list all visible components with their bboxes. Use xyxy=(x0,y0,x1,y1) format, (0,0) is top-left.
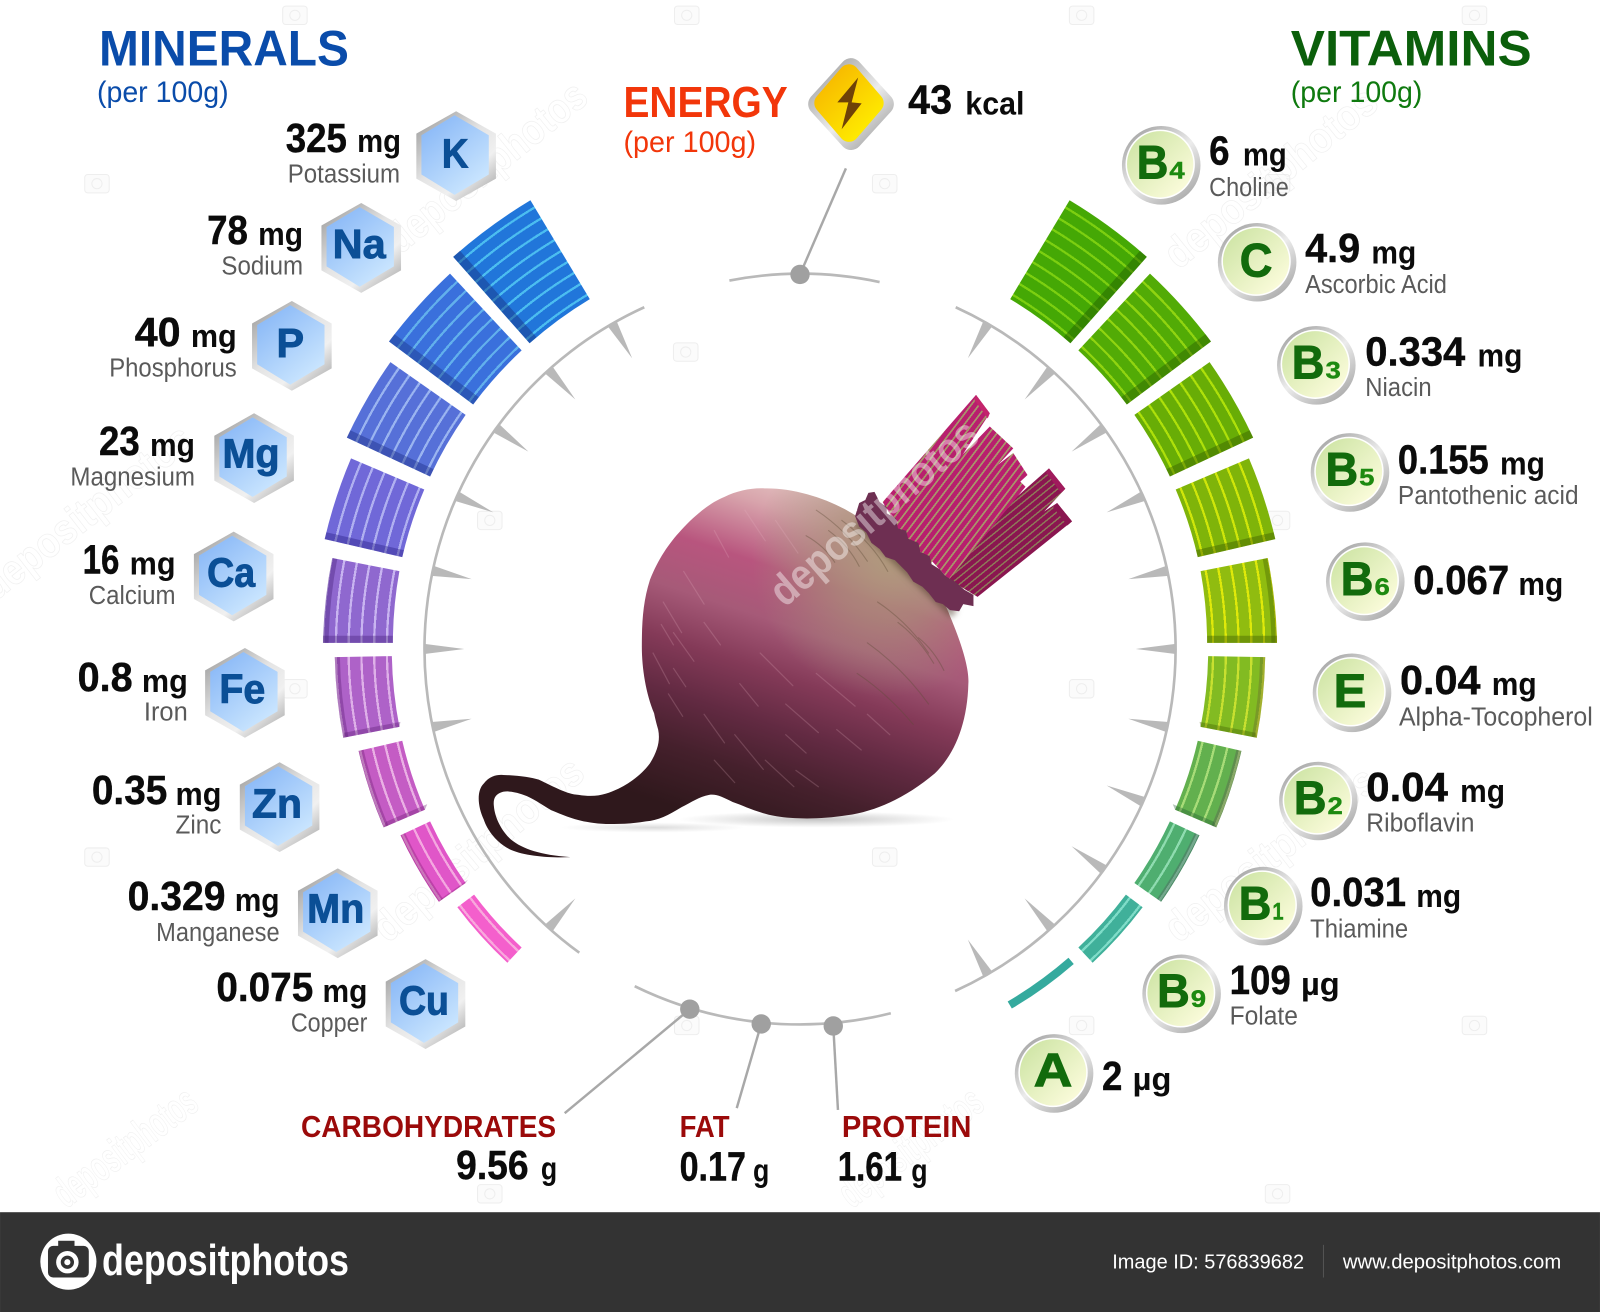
vitamin: B2 riboflavin: mg xyxy=(1460,772,1505,809)
bar: pantothenic acid xyxy=(1176,458,1275,557)
vitamin: B4 choline: Choline xyxy=(1209,174,1289,202)
vitamin: B4 choline: 4 xyxy=(1169,158,1185,185)
heading: vitamins: (per 100g) xyxy=(1291,76,1422,109)
faint watermark lettering: depositphotos xyxy=(829,1077,993,1217)
energy value: 43 xyxy=(908,76,952,122)
beet stems xyxy=(883,395,1072,597)
bar chart: vitamins xyxy=(1008,200,1277,1009)
mineral: sodium: mg xyxy=(258,215,303,252)
bar chart: minerals xyxy=(323,200,590,963)
vitamin: B9 folate: 9 xyxy=(1191,986,1206,1013)
mineral: copper xyxy=(216,959,465,1049)
bar: potassium xyxy=(453,200,590,343)
vitamin: B2 riboflavin: Riboflavin xyxy=(1366,810,1474,838)
bar: vitamin A xyxy=(1008,958,1074,1009)
vitamin: A xyxy=(1015,1034,1171,1113)
vitamin: B9 folate: B xyxy=(1157,965,1190,1017)
mineral: iron: mg xyxy=(142,662,188,699)
vitamin: C ascorbic acid: mg xyxy=(1371,233,1416,270)
mineral: phosphorus: Phosphorus xyxy=(109,355,237,383)
mineral: phosphorus: P xyxy=(277,320,304,366)
mineral: copper: 0.075 xyxy=(216,964,313,1010)
mineral: magnesium: 23 xyxy=(99,418,140,464)
beet crown shading xyxy=(479,488,968,857)
mineral: potassium xyxy=(286,111,496,201)
gauge: inner ring arcs xyxy=(424,274,1176,1024)
vitamin: B1 thiamine: B xyxy=(1239,877,1271,929)
mineral: iron xyxy=(78,648,285,738)
beet body xyxy=(479,488,968,857)
energy value: kcal xyxy=(965,84,1024,121)
mineral: zinc: Zn xyxy=(252,780,302,826)
bar: phosphorus xyxy=(347,362,466,477)
macronutrient: carbohydrates xyxy=(301,1110,557,1188)
mineral: calcium: 16 xyxy=(83,536,119,582)
macronutrient pointers xyxy=(565,999,843,1113)
vitamin: B1 thiamine: 0.031 xyxy=(1310,869,1406,915)
vitamin: B5 pantothenic acid: 0.155 xyxy=(1398,436,1489,482)
bar: folate xyxy=(1078,895,1143,963)
mineral: potassium: mg xyxy=(357,122,401,159)
bar: copper xyxy=(457,895,522,963)
vitamin: B2 riboflavin: B xyxy=(1294,772,1327,824)
vitamin: A: 2 xyxy=(1102,1053,1122,1099)
watermark across beet: depositphotos xyxy=(760,410,988,616)
faint watermark lettering: depositphotos xyxy=(1155,77,1387,278)
vitamin: B1 thiamine: 1 xyxy=(1272,898,1284,925)
vitamin: B4 choline: 6 xyxy=(1209,127,1230,173)
bar: sodium xyxy=(389,274,522,404)
vitamin: E alpha-tocopherol xyxy=(1313,654,1593,732)
mineral: sodium xyxy=(207,203,401,293)
macronutrient: protein: PROTEIN xyxy=(842,1110,971,1144)
mineral: manganese: 0.329 xyxy=(128,873,226,919)
vitamin: B6: 0.067 xyxy=(1413,557,1509,603)
mineral: potassium: Potassium xyxy=(288,161,400,189)
vitamin: B1 thiamine: Thiamine xyxy=(1310,916,1408,944)
vitamin: A: µg xyxy=(1133,1060,1171,1097)
macronutrient: protein: 1.61 xyxy=(838,1144,902,1190)
illustration: beetroot xyxy=(479,395,1072,857)
macronutrient: fat: 0.17 xyxy=(680,1144,746,1190)
bar: zinc xyxy=(359,741,427,827)
macronutrient: fat: FAT xyxy=(680,1110,730,1144)
mineral: magnesium: Mg xyxy=(222,430,280,476)
faint watermark cameras xyxy=(85,6,1487,1203)
bar: alpha-tocopherol xyxy=(1200,656,1265,738)
vitamin: B6: 6 xyxy=(1374,574,1390,601)
mineral: magnesium xyxy=(70,413,294,503)
mineral: sodium: 78 xyxy=(207,207,248,253)
faint watermark lettering xyxy=(0,71,1387,1217)
heading: energy xyxy=(623,78,788,159)
mineral: sodium: Na xyxy=(333,221,386,267)
icon: camera logo xyxy=(40,1234,96,1290)
shadow under leaf ruffle xyxy=(857,522,954,614)
mineral: zinc: mg xyxy=(176,775,221,812)
vitamin: B5 pantothenic acid: B xyxy=(1325,444,1358,496)
vitamin: B2 riboflavin: 0.04 xyxy=(1366,764,1448,810)
faint watermark lettering: depositphotos xyxy=(1155,757,1386,952)
mineral: manganese xyxy=(128,868,378,958)
beet skin streaks xyxy=(653,510,944,787)
mineral: calcium: Ca xyxy=(207,550,255,596)
vitamin: E alpha-tocopherol: mg xyxy=(1492,665,1537,702)
heading: energy: ENERGY xyxy=(623,78,788,127)
mineral: sodium: Sodium xyxy=(221,252,303,280)
vitamin: E alpha-tocopherol: 0.04 xyxy=(1400,657,1481,703)
macronutrient: fat xyxy=(680,1110,769,1190)
mineral: phosphorus xyxy=(109,301,332,391)
minerals list xyxy=(70,111,496,1049)
mineral: manganese: mg xyxy=(235,881,280,918)
mineral: magnesium: Magnesium xyxy=(70,464,195,492)
bar: niacin xyxy=(1134,362,1253,477)
bar: choline xyxy=(1010,200,1147,343)
vitamin: C ascorbic acid xyxy=(1218,223,1447,302)
mineral: manganese: Mn xyxy=(307,885,364,931)
gauge: tick marks xyxy=(425,321,1175,977)
vitamin: A: A xyxy=(1034,1045,1072,1097)
mineral: copper: Cu xyxy=(399,977,449,1023)
bar: riboflavin xyxy=(1173,741,1241,827)
bar: iron xyxy=(335,656,400,738)
bar: ascorbic acid xyxy=(1078,274,1211,404)
vitamin: C ascorbic acid: C xyxy=(1240,235,1272,287)
vitamin: B9 folate: 109 xyxy=(1230,957,1291,1003)
icon: energy lightning diamond xyxy=(819,69,883,139)
beet leaf ruffle xyxy=(855,492,973,611)
mineral: iron: Iron xyxy=(144,698,188,726)
macronutrient: protein xyxy=(838,1110,971,1190)
vitamin: E alpha-tocopherol: Alpha-Tocopherol xyxy=(1399,703,1593,731)
macronutrient: carbohydrates: CARBOHYDRATES xyxy=(301,1110,556,1144)
vitamin: B6 xyxy=(1326,542,1563,621)
mineral: calcium xyxy=(83,532,273,621)
mineral: magnesium: mg xyxy=(150,426,195,463)
mineral: zinc xyxy=(92,762,319,852)
vitamin: B2 riboflavin xyxy=(1279,762,1505,840)
mineral: copper: Copper xyxy=(291,1010,368,1038)
mineral: calcium: mg xyxy=(130,544,176,581)
vitamin: C ascorbic acid: 4.9 xyxy=(1305,225,1360,271)
vitamin: B2 riboflavin: 2 xyxy=(1328,793,1343,820)
mineral: iron: 0.8 xyxy=(78,654,133,700)
bar: thiamine xyxy=(1134,821,1199,902)
mineral: potassium: K xyxy=(442,130,469,176)
logo wordmark: depositphotos xyxy=(102,1236,349,1285)
vitamin: E alpha-tocopherol: E xyxy=(1334,665,1366,717)
vitamin: B3 niacin: mg xyxy=(1478,336,1522,373)
vitamin: B3 niacin xyxy=(1277,326,1522,405)
footer bar xyxy=(0,1212,1600,1312)
website: www.depositphotos.com xyxy=(1342,1251,1561,1273)
faint watermark lettering: depositphotos xyxy=(376,71,597,263)
vitamin: B9 folate xyxy=(1142,955,1340,1033)
vitamins list xyxy=(1015,126,1593,1113)
mineral: zinc: 0.35 xyxy=(92,767,167,813)
heading: minerals: MINERALS xyxy=(99,20,349,76)
heading: vitamins: VITAMINS xyxy=(1291,20,1532,76)
vitamin: C ascorbic acid: Ascorbic Acid xyxy=(1305,271,1447,299)
vitamin: B3 niacin: 3 xyxy=(1325,358,1341,385)
vitamin: B5 pantothenic acid: mg xyxy=(1500,444,1545,481)
mineral: copper: mg xyxy=(322,972,367,1009)
mineral: potassium: 325 xyxy=(286,115,347,161)
bar: calcium xyxy=(323,558,399,643)
bar: vitamin B6 xyxy=(1201,558,1277,643)
vitamin: B1 thiamine: mg xyxy=(1416,877,1461,914)
vitamin: B5 pantothenic acid: Pantothenic acid xyxy=(1398,482,1579,510)
vitamin: B3 niacin: Niacin xyxy=(1365,374,1432,402)
vitamin: B1 thiamine xyxy=(1224,867,1461,945)
energy pointer xyxy=(790,168,846,284)
faint watermark lettering: depositphotos xyxy=(363,747,594,952)
energy value xyxy=(908,76,1024,122)
vitamin: B4 choline xyxy=(1122,126,1289,205)
heading: energy: (per 100g) xyxy=(623,126,756,159)
vitamin: B3 niacin: 0.334 xyxy=(1365,328,1466,374)
heading: minerals: (per 100g) xyxy=(97,76,229,109)
heading: vitamins xyxy=(1291,20,1532,109)
mineral: phosphorus: mg xyxy=(191,317,237,354)
vitamin: B5 pantothenic acid: 5 xyxy=(1359,465,1374,492)
bar: magnesium xyxy=(325,458,424,557)
image id: Image ID: 576839682 xyxy=(1112,1251,1304,1273)
vitamin: B4 choline: mg xyxy=(1243,135,1287,172)
faint watermark lettering: depositphotos xyxy=(43,1077,207,1217)
ground shadow xyxy=(561,811,954,833)
macronutrient: carbohydrates: 9.56 xyxy=(456,1142,529,1188)
vitamin: B5 pantothenic acid xyxy=(1311,433,1579,512)
vitamin: B6: B xyxy=(1341,553,1373,605)
vitamin: B6: mg xyxy=(1518,565,1563,602)
mineral: calcium: Calcium xyxy=(89,582,176,610)
heading: minerals xyxy=(97,20,349,109)
mineral: manganese: Manganese xyxy=(156,919,280,947)
macronutrient: fat: g xyxy=(753,1152,769,1189)
mineral: phosphorus: 40 xyxy=(135,309,181,355)
vitamin: B4 choline: B xyxy=(1137,137,1168,189)
bar: manganese xyxy=(401,821,468,902)
vitamin: B3 niacin: B xyxy=(1292,337,1324,389)
mineral: zinc: Zinc xyxy=(176,812,222,840)
macronutrient: protein: g xyxy=(911,1152,928,1189)
mineral: iron: Fe xyxy=(219,666,265,712)
vitamin: B9 folate: µg xyxy=(1301,965,1340,1002)
vitamin: B9 folate: Folate xyxy=(1230,1002,1298,1030)
macronutrient: carbohydrates: g xyxy=(541,1150,557,1187)
